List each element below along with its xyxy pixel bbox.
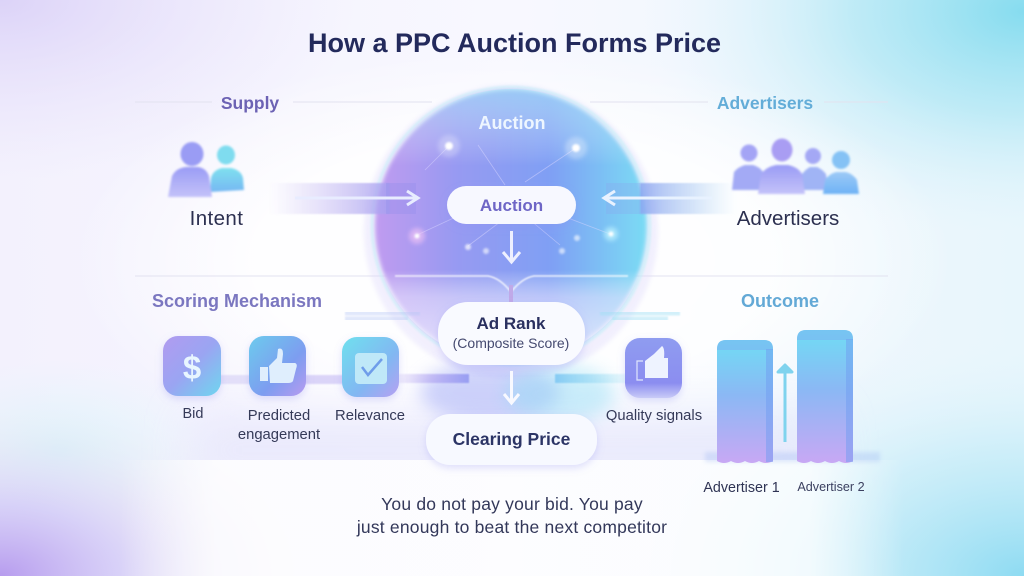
icon: relevance bbox=[342, 337, 399, 397]
clearing price pill: Clearing Price bbox=[453, 429, 571, 449]
clearing price pill bbox=[426, 414, 597, 465]
bar: advertiser 1 bbox=[717, 340, 773, 463]
icon: quality signals bbox=[625, 338, 682, 398]
icon: advertisers people bbox=[732, 138, 859, 194]
label: relevance: Relevance bbox=[335, 408, 405, 424]
ad rank pill bbox=[438, 302, 585, 365]
left arrow band: intent to auction bbox=[270, 183, 418, 214]
right arrow band: advertisers to auction bbox=[604, 183, 736, 214]
intent label: Intent bbox=[190, 207, 243, 230]
bar: advertiser 2 bbox=[797, 330, 853, 463]
arrow: increase bbox=[778, 365, 792, 442]
advertisers heading: Advertisers bbox=[717, 93, 813, 113]
label: predicted engagement: engagement bbox=[238, 427, 320, 443]
supply heading: Supply bbox=[221, 93, 279, 113]
label: quality signals: Quality signals bbox=[606, 408, 702, 424]
icon: predicted engagement bbox=[249, 336, 306, 396]
scoring mechanism heading: Scoring Mechanism bbox=[152, 291, 322, 311]
advertisers label: Advertisers bbox=[737, 207, 839, 230]
bar chart: advertiser comparison bbox=[705, 330, 880, 463]
label: bid: Bid bbox=[183, 406, 203, 422]
sphere label: Auction bbox=[478, 113, 546, 133]
label: advertiser 1: Advertiser 1 bbox=[703, 480, 780, 496]
ad rank pill: Ad Rank bbox=[477, 314, 546, 333]
auction pill bbox=[447, 186, 576, 224]
takeaway text: just enough to beat the next competitor bbox=[356, 517, 667, 537]
icon: bid bbox=[163, 336, 221, 396]
sphere: auction bbox=[364, 85, 658, 379]
auction pill: Auction bbox=[480, 196, 543, 215]
outcome heading: Outcome bbox=[741, 291, 819, 311]
ad rank pill: (Composite Score) bbox=[453, 335, 569, 351]
arrow: ad rank to clearing price bbox=[504, 371, 519, 403]
title: How a PPC Auction Forms Price bbox=[308, 28, 721, 58]
icon: intent people bbox=[168, 142, 244, 197]
connector band bbox=[215, 313, 680, 422]
arrow: auction to ad rank bbox=[503, 231, 520, 262]
icon: bid: $ bbox=[183, 349, 201, 386]
label: advertiser 2: Advertiser 2 bbox=[797, 480, 865, 494]
label: predicted engagement: Predicted bbox=[248, 408, 310, 424]
takeaway text: You do not pay your bid. You pay bbox=[381, 494, 643, 514]
